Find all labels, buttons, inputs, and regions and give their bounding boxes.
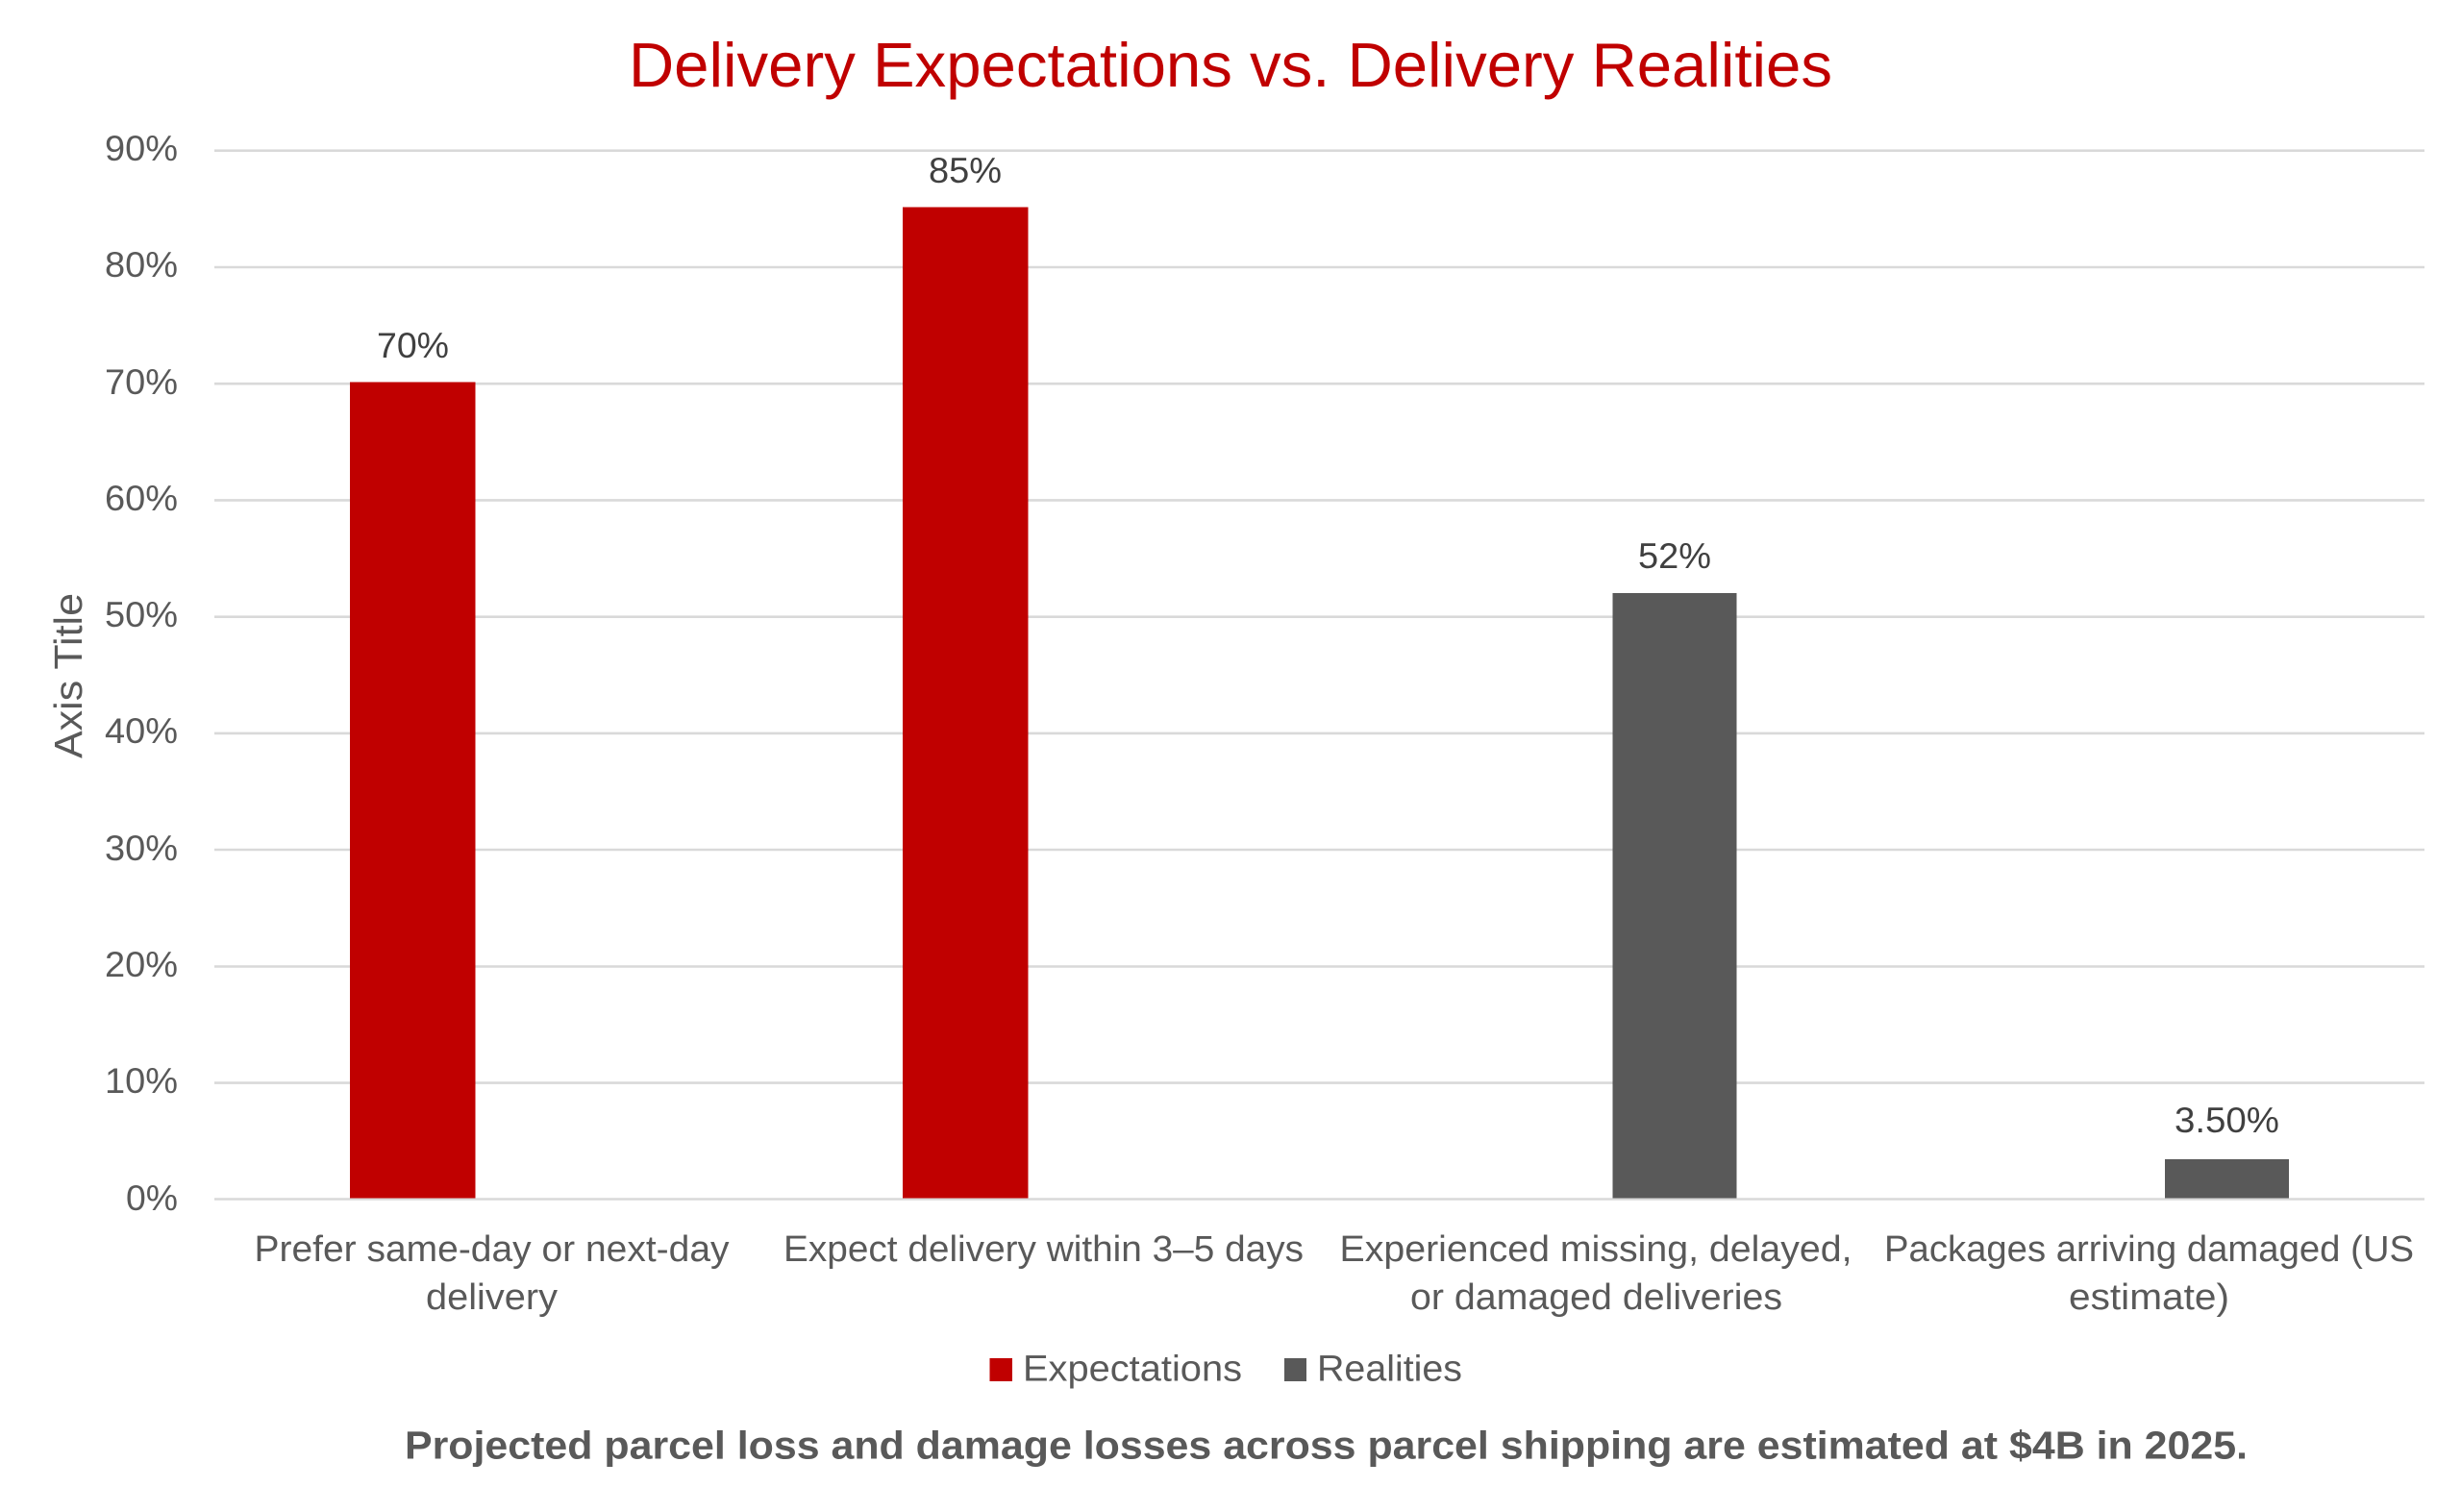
y axis tick labels: 50% <box>105 595 178 634</box>
category labels: or damaged deliveries <box>1410 1277 1782 1318</box>
y axis tick labels <box>105 129 178 1218</box>
y axis tick labels: 10% <box>105 1061 178 1101</box>
legend <box>990 1350 1462 1390</box>
data labels: 85% <box>929 151 1002 190</box>
data labels: 3.50% <box>2175 1101 2279 1140</box>
y axis tick labels: 20% <box>105 945 178 984</box>
y axis tick labels: 0% <box>126 1178 178 1218</box>
y axis tick labels: 30% <box>105 829 178 868</box>
y axis tick labels: 80% <box>105 245 178 285</box>
bar: prefer same-day or next-day 70% <box>350 383 475 1198</box>
category labels: Experienced missing, delayed, <box>1340 1229 1852 1270</box>
legend label: expectations: Expectations <box>1023 1350 1242 1390</box>
legend swatch: realities <box>1284 1358 1306 1381</box>
footnote: Projected parcel loss and damage losses across parcel shipping are estimated at $4B in 2025. <box>405 1423 2248 1467</box>
bars: expectations <box>350 208 1029 1198</box>
data labels: 52% <box>1638 536 1711 576</box>
y axis title: Axis Title <box>46 593 90 758</box>
y axis tick labels: 90% <box>105 129 178 168</box>
title: Delivery Expectations vs. Delivery Realities <box>629 30 1832 100</box>
category labels: Prefer same-day or next-day <box>254 1229 729 1270</box>
legend swatch: expectations <box>990 1358 1012 1381</box>
category labels: delivery <box>426 1277 558 1318</box>
y axis tick labels: 40% <box>105 711 178 751</box>
bars: realities <box>1613 593 2289 1198</box>
category labels: Expect delivery within 3–5 days <box>783 1229 1304 1270</box>
y axis tick labels: 70% <box>105 362 178 402</box>
bar: expect delivery within 3-5 days 85% <box>903 208 1029 1198</box>
category labels <box>254 1229 2414 1318</box>
category labels: Packages arriving damaged (US <box>1884 1229 2414 1270</box>
data labels <box>377 151 2279 1140</box>
category labels: estimate) <box>2069 1277 2229 1318</box>
legend label: realities: Realities <box>1317 1350 1462 1390</box>
bar: packages arriving damaged 3.5% <box>2165 1159 2289 1198</box>
y axis tick labels: 60% <box>105 479 178 518</box>
data labels: 70% <box>377 326 449 365</box>
bar: experienced missing, delayed or damaged 52% <box>1613 593 1736 1198</box>
